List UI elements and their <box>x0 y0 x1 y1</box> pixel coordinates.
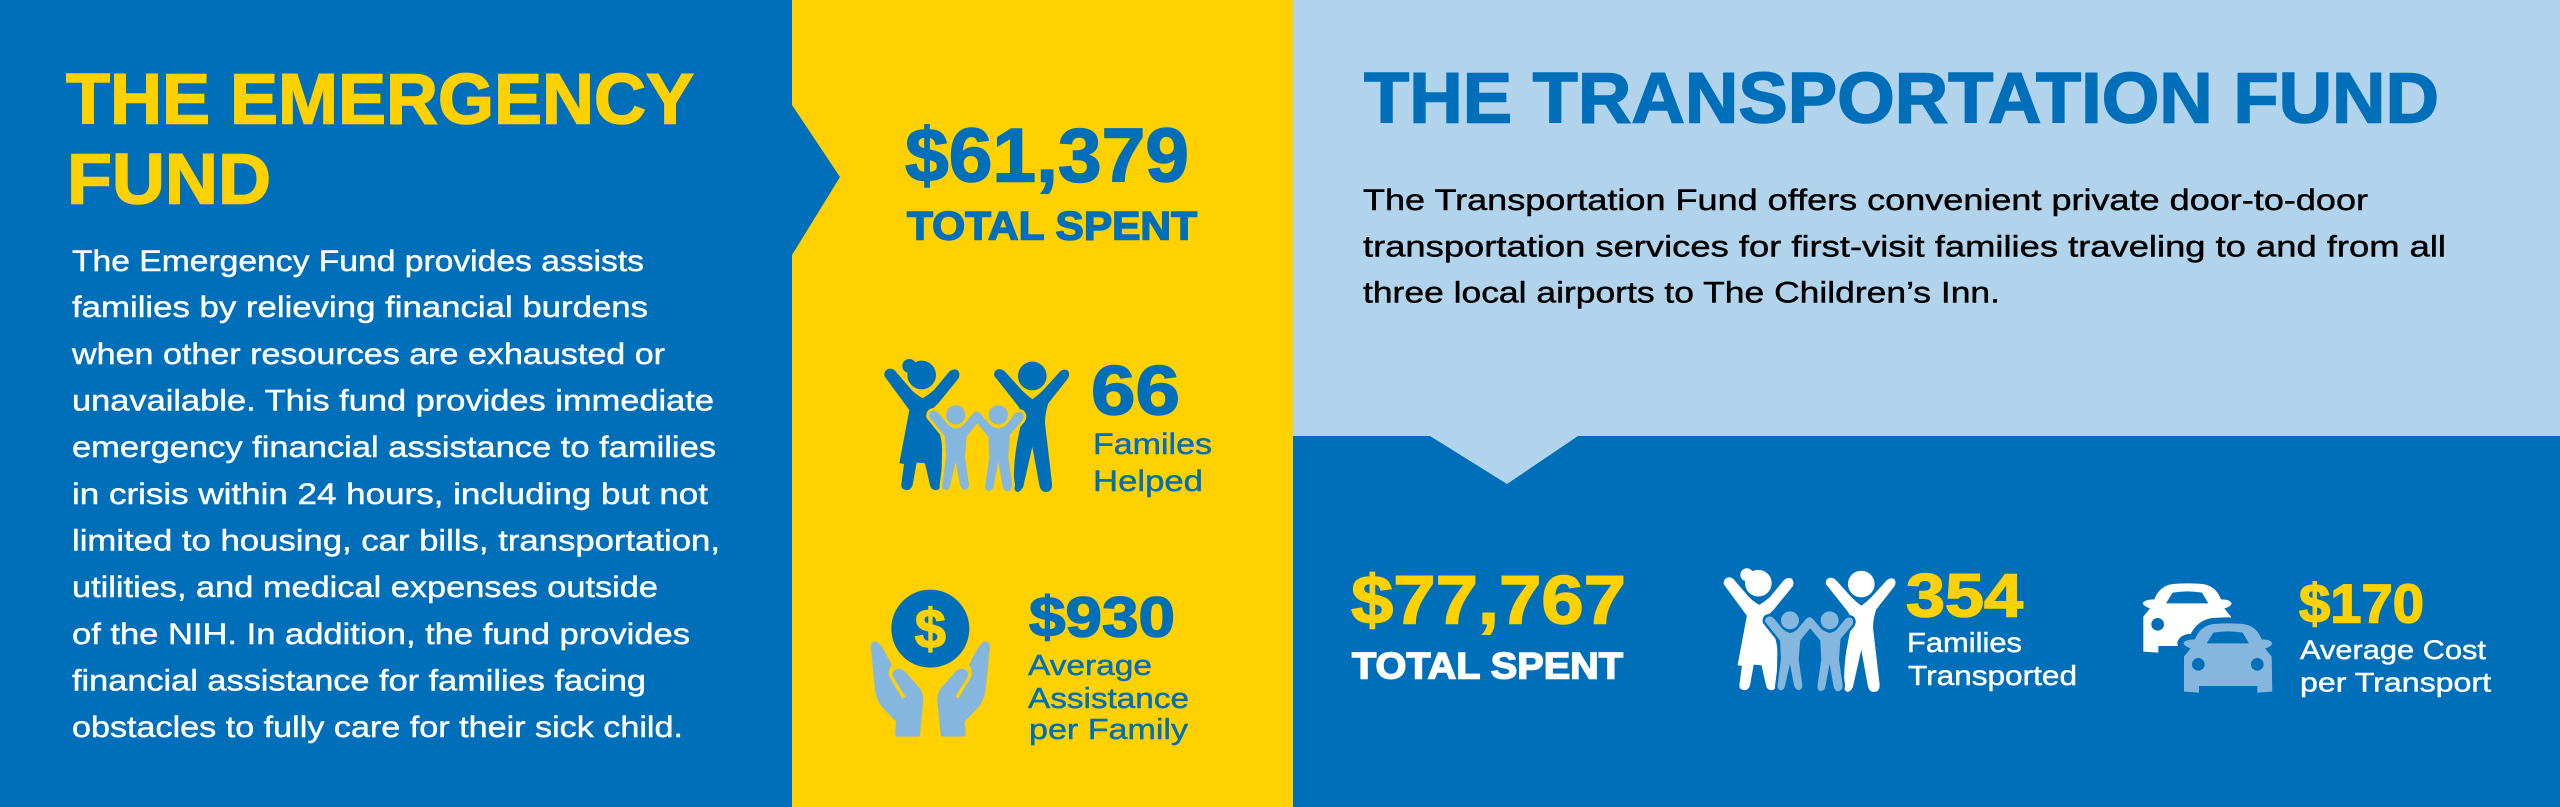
heading: the emergency fund: FUND <box>67 140 271 220</box>
text block: emergency fund description: emergency financial assistance to families <box>72 431 716 464</box>
heading: the transportation fund: THE TRANSPORTATION FUND <box>1364 60 2439 138</box>
text block: emergency fund description: financial assistance for families facing <box>72 665 646 698</box>
stat: total spent: $61,379 <box>905 114 1189 198</box>
stat: average cost per transport <box>2299 572 2492 698</box>
text block: emergency fund description: in crisis within 24 hours, including but not <box>72 478 709 511</box>
text block: emergency fund description: families by relieving financial burdens <box>72 291 648 324</box>
stat: average assistance per family: $930 <box>1029 586 1175 650</box>
stat: average assistance per family: Average <box>1028 650 1152 682</box>
stat: total spent: TOTAL SPENT <box>907 204 1197 248</box>
text block: emergency fund description <box>71 245 720 744</box>
panel: the transportation fund header <box>1293 0 2560 437</box>
text block: transportation fund description <box>1363 184 2446 310</box>
stat: families transported: 354 <box>1906 562 2023 630</box>
panel: the emergency fund <box>0 0 792 807</box>
stat: average assistance per family: per Family <box>1029 714 1189 746</box>
text block: emergency fund description: unavailable. This fund provides immediate <box>72 385 714 418</box>
icon: hands holding coin: $ <box>915 597 946 660</box>
stat: average cost per transport: Average Cost <box>2300 635 2487 665</box>
text block: emergency fund description: utilities, and medical expenses outside <box>72 571 658 604</box>
stat: families transported <box>1906 562 2077 691</box>
stat: average assistance per family <box>1028 586 1189 746</box>
stat: total spent <box>1351 562 1626 686</box>
text block: emergency fund description: The Emergency Fund provides assists <box>72 245 644 278</box>
stat: total spent <box>905 114 1197 248</box>
panel: transportation fund statistics <box>1293 436 2560 807</box>
stat: families helped: Helped <box>1093 465 1203 498</box>
text block: transportation fund description: three local airports to The Children’s Inn. <box>1363 277 2000 310</box>
stat: families transported: Families <box>1907 627 2022 658</box>
panel: emergency fund statistics <box>792 0 1293 807</box>
stat: total spent: $77,767 <box>1351 562 1626 638</box>
text block: emergency fund description: limited to housing, car bills, transportation, <box>72 525 720 558</box>
stat: families helped <box>1091 352 1212 498</box>
stat: total spent: TOTAL SPENT <box>1352 646 1623 686</box>
icon: blue car <box>2183 623 2272 693</box>
text block: emergency fund description: when other resources are exhausted or <box>71 338 665 371</box>
text block: emergency fund description: obstacles to fully care for their sick child. <box>72 711 683 744</box>
stat: average cost per transport: per Transport <box>2300 668 2492 698</box>
text block: transportation fund description: The Transportation Fund offers convenient private door-to-door <box>1363 184 2368 217</box>
stat: average assistance per family: Assistance <box>1028 683 1189 715</box>
icon: family <box>1724 568 1896 692</box>
heading: the emergency fund <box>66 60 694 220</box>
icon: two cars <box>2143 583 2272 693</box>
text block: emergency fund description: of the NIH. In addition, the fund provides <box>72 618 690 651</box>
icon: family <box>884 359 1069 492</box>
arrow: notch pointing into statistics <box>1430 436 1578 484</box>
arrow: pointing into statistics panel <box>792 105 840 255</box>
icon: white car <box>2143 583 2232 653</box>
stat: average cost per transport: $170 <box>2299 572 2424 634</box>
text block: transportation fund description: transportation services for first-visit families traveling to and from all <box>1363 231 2446 264</box>
stat: families transported: Transported <box>1908 660 2077 691</box>
heading: the emergency fund: THE EMERGENCY <box>66 60 694 140</box>
stat: families helped: 66 <box>1091 352 1180 430</box>
stat: families helped: Familes <box>1093 428 1212 461</box>
icon: hands holding coin <box>871 590 990 737</box>
